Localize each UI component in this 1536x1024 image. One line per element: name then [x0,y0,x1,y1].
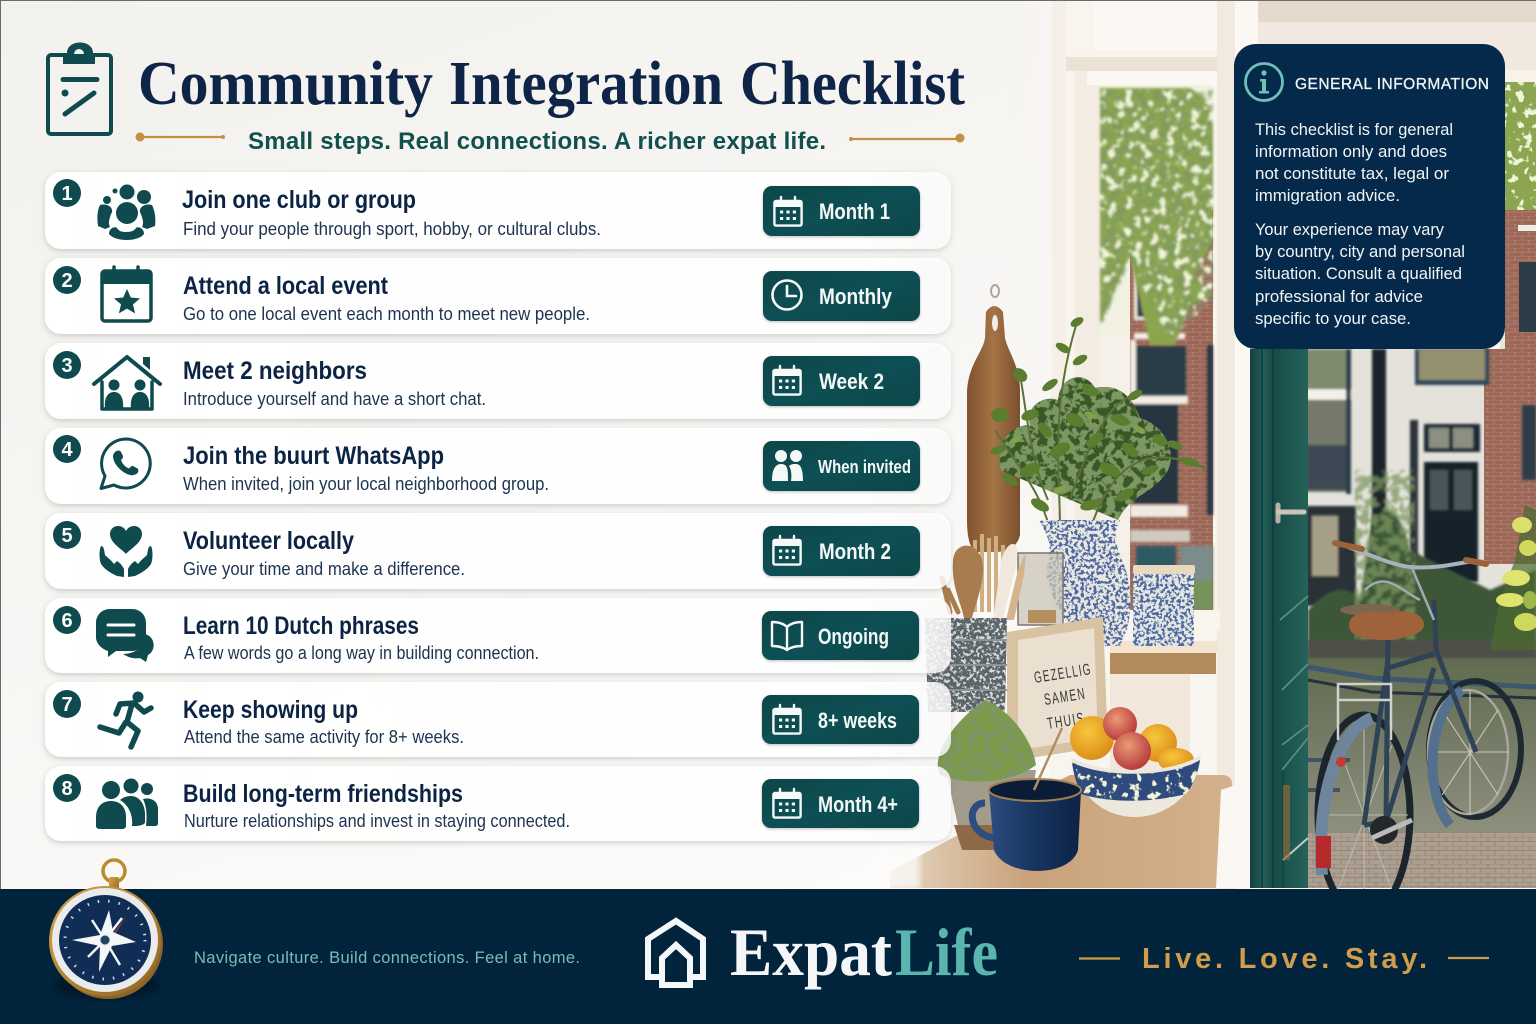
canal and pavement [1308,640,1536,888]
info paragraph 2: specific to your case. [1255,309,1411,328]
panel: checklist row 4 [45,428,951,504]
panel: checklist row 3 [45,343,951,419]
step description: Attend the same activity for 8+ weeks. [184,727,464,747]
title [138,50,965,118]
timing badge: Monthly [819,284,893,309]
icon: WhatsApp chat bubble [101,439,150,488]
icon: house with neighbors [94,357,160,409]
letter board sign: GEZELLIG [1033,661,1093,687]
number badge 3: 3 [61,355,73,377]
subtitle with gold rules [136,128,964,155]
step description: Nurture relationships and invest in staying connected. [184,811,570,831]
street view through door [1306,349,1536,670]
number badge 7 [53,690,81,718]
utensils and metal crock [925,534,1026,712]
timing badge: Ongoing [818,624,889,649]
yellow-green shrub right [1490,505,1536,650]
number badge 8 [53,774,81,802]
panel: checklist row 1 [45,172,951,249]
wooden counter [890,775,1250,888]
fade into left panel [880,700,920,889]
row card [45,428,951,504]
window sill and shelf [1096,610,1220,779]
letter board sign: THUIS [1046,710,1086,733]
timing badge [763,526,920,576]
timing badge [763,271,920,321]
timing badge [762,779,919,828]
step heading: Keep showing up [183,696,358,724]
info paragraph 2: situation. Consult a qualified [1255,264,1462,283]
logo: ExpatLife [648,914,998,990]
icon: group of people [97,184,155,240]
title: Integration [449,50,723,118]
panel: checklist row 2 [45,258,951,334]
row card [45,682,951,757]
panel background [1234,44,1505,349]
row card [45,258,951,334]
bicycle [1316,543,1521,915]
step heading: Build long-term friendships [183,780,463,808]
timing badge: Month 2 [819,539,891,564]
icon: gold pocket compass [49,860,163,999]
step description: A few words go a long way in building connection. [184,643,539,663]
row card [45,172,951,249]
icon: heart in hands [100,526,152,577]
number badge 4: 4 [61,439,73,461]
timing badge [762,695,919,744]
info paragraph 2: professional for advice [1255,287,1423,306]
panel: general information [1234,44,1505,349]
icon: info circle [1246,64,1282,100]
timing badge: Month 1 [819,199,890,224]
number badge 1: 1 [61,183,73,205]
number badge 2 [53,266,81,294]
letter board sign: SAMEN [1043,686,1087,709]
icon: running person [100,692,151,747]
step heading: Attend a local event [183,272,389,300]
green front door [1250,349,1308,888]
photo: Dutch canal-house kitchen window scene [880,0,1536,915]
number badge 7: 7 [61,694,73,716]
glass jar [1018,553,1063,625]
icon: house logo [648,921,703,985]
blue and white vase [1039,520,1130,646]
number badge 8: 8 [61,778,73,800]
info paragraph 2: Your experience may vary [1255,220,1444,239]
timing badge: 8+ weeks [818,708,897,733]
step description: When invited, join your local neighborhood group. [183,474,549,494]
cutting board on the wall [967,285,1020,552]
left window view: trees and brick house [1100,85,1213,610]
number badge 6: 6 [61,610,73,632]
number badge 1 [53,179,81,207]
title: Community [138,50,433,118]
info paragraph 1 [1255,120,1453,205]
footer bar [0,889,1536,1024]
number badge 3 [53,351,81,379]
info paragraph 1: This checklist is for general [1255,120,1453,139]
step heading: Join the buurt WhatsApp [183,442,444,470]
number badge 4 [53,435,81,463]
step heading: Meet 2 neighbors [183,357,367,385]
slogan: Live. Love. Stay. [1142,943,1427,975]
info paragraph 1: not constitute tax, legal or [1255,164,1449,183]
window frame and wall [1010,0,1536,889]
step description: Go to one local event each month to meet new people. [183,304,590,324]
herb pot [938,700,1036,850]
step heading: Volunteer locally [183,527,354,555]
panel: checklist row 7 [45,682,951,757]
ceramic canister [1133,565,1195,646]
herb plant [989,315,1205,530]
number badge 2: 2 [61,270,73,292]
info paragraph 1: information only and does [1255,142,1447,161]
wordmark accent: Life [895,914,998,990]
step description: Introduce yourself and have a short chat. [183,389,486,409]
blue ceramic mug [972,728,1081,871]
step heading: Join one club or group [182,186,416,214]
row card [45,598,951,673]
timing badge [763,356,920,406]
info heading: GENERAL INFORMATION [1295,76,1489,93]
row card [45,766,951,841]
panel: checklist row 5 [45,513,951,589]
footer tagline: Navigate culture. Build connections. Feel at home. [194,949,580,967]
timing badge: Month 4+ [818,792,898,817]
subtitle with gold rules: Small steps. Real connections. A richer expat life. [248,128,826,155]
timing badge: Week 2 [819,369,884,394]
icon: calendar with star [101,267,152,321]
panel: checklist row 8 [45,766,951,841]
timing badge [763,441,920,491]
title: Checklist [740,50,965,118]
number badge 6 [53,606,81,634]
timing badge [762,611,919,660]
clipboard icon [48,42,111,134]
timing badge: When invited [818,457,911,477]
info paragraph 1: immigration advice. [1255,186,1400,205]
row card [45,513,951,589]
timing badge [763,186,920,236]
info paragraph 2 [1255,220,1465,328]
wordmark: Expat [730,914,892,990]
row card [45,343,951,419]
icon: chat bubbles [96,609,154,662]
letter board sign [1007,617,1108,758]
step description: Give your time and make a difference. [183,559,465,579]
fruit bowl [1070,707,1201,817]
right window strip above the door [1500,82,1536,352]
step description: Find your people through sport, hobby, or cultural clubs. [183,219,601,239]
icon: three people [96,778,158,829]
panel: checklist row 6 [45,598,951,673]
number badge 5 [53,521,81,549]
info paragraph 2: by country, city and personal [1255,242,1465,261]
number badge 5: 5 [61,525,73,547]
step heading: Learn 10 Dutch phrases [183,612,419,640]
